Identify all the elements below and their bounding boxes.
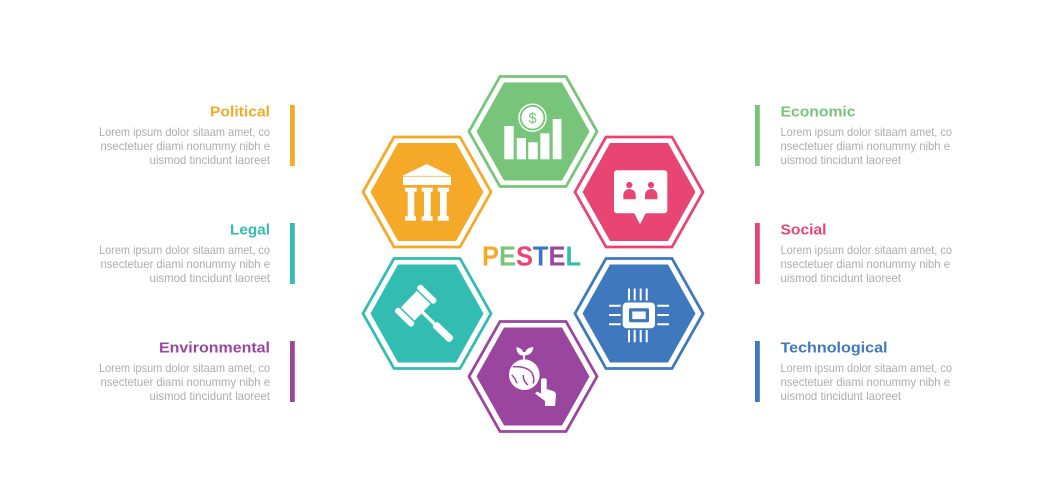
hexagon: environmental (469, 322, 597, 432)
text block: technological: Lorem ipsum dolor sitaam amet, co (780, 361, 952, 375)
heading: technological: Technological (780, 340, 888, 356)
icon: chart with dollar coin (504, 102, 562, 159)
accent bar: legal (290, 223, 295, 284)
heading: environmental: Environmental (159, 340, 270, 356)
text block: environmental: nsectetuer diami nonummy nibh e (100, 375, 270, 389)
hexagon: economic (469, 76, 597, 186)
hexagon: technological (575, 258, 703, 368)
hexagon: legal (363, 258, 491, 368)
icon: chart with dollar coin: $ (528, 110, 537, 127)
text block: legal: Lorem ipsum dolor sitaam amet, co (99, 243, 270, 257)
panel: social text (755, 222, 952, 285)
text block: economic (780, 125, 952, 167)
icon: speech bubble with two people (614, 170, 667, 224)
accent bar: environmental (290, 341, 295, 402)
panel: environmental text (99, 340, 295, 403)
panel: economic text (755, 104, 952, 167)
accent bar: social (755, 223, 760, 284)
text block: economic: uismod tincidunt laoreet (780, 153, 902, 167)
title: PESTEL: PESTEL (482, 240, 581, 272)
icon: globe with plant and pointing hand (509, 347, 556, 406)
accent bar: economic (755, 105, 760, 166)
hexagon: social (575, 137, 703, 247)
text block: environmental: Lorem ipsum dolor sitaam amet, co (99, 361, 270, 375)
icon: gavel (394, 284, 465, 354)
text block: economic: Lorem ipsum dolor sitaam amet, co (780, 125, 952, 139)
text block: legal (99, 243, 271, 285)
text block: environmental (99, 361, 271, 403)
text block: technological: uismod tincidunt laoreet (780, 389, 902, 403)
heading: social: Social (780, 222, 826, 238)
heading: economic: Economic (780, 104, 856, 120)
text block: political: Lorem ipsum dolor sitaam amet, co (99, 125, 270, 139)
heading: legal: Legal (230, 222, 270, 238)
text block: political: nsectetuer diami nonummy nibh e (100, 139, 270, 153)
text block: technological: nsectetuer diami nonummy nibh e (780, 375, 950, 389)
hexagon: political (363, 137, 491, 247)
text block: social (780, 243, 952, 285)
text block: political (99, 125, 271, 167)
icon: bank building (402, 164, 451, 221)
heading: political: Political (210, 104, 270, 120)
text block: political: uismod tincidunt laoreet (150, 153, 271, 167)
panel: legal text (99, 222, 295, 285)
text block: social: Lorem ipsum dolor sitaam amet, co (780, 243, 952, 257)
text block: environmental: uismod tincidunt laoreet (150, 389, 271, 403)
panel: political text (99, 104, 295, 167)
text block: technological (780, 361, 952, 403)
text block: legal: uismod tincidunt laoreet (150, 271, 271, 285)
panel: technological text (755, 340, 952, 403)
text block: social: nsectetuer diami nonummy nibh e (780, 257, 950, 271)
accent bar: political (290, 105, 295, 166)
text block: economic: nsectetuer diami nonummy nibh e (780, 139, 950, 153)
icon: microchip (609, 288, 669, 342)
accent bar: technological (755, 341, 760, 402)
text block: social: uismod tincidunt laoreet (780, 271, 902, 285)
text block: legal: nsectetuer diami nonummy nibh e (100, 257, 270, 271)
